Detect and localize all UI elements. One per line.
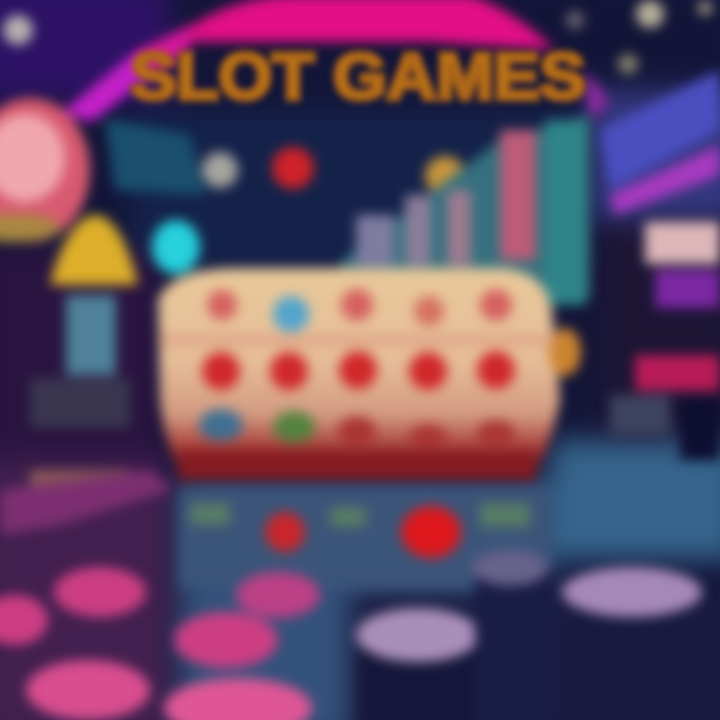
middle row symbols [202,351,515,390]
green indicators [190,503,530,527]
machine body [158,268,560,478]
machine side knob [549,328,581,376]
pink arch canopy [62,0,610,122]
top row symbols [207,289,512,332]
bar chart style backdrop [340,115,590,305]
machine base [178,450,536,480]
icon: red button large [401,506,461,558]
icon: floating symbols above machine [105,118,465,274]
title: SLOT GAMES [130,39,586,113]
left lamp [30,215,138,494]
pink stools left [0,470,320,720]
lower panel and buttons [180,488,550,588]
bottom row symbols [199,409,515,446]
button panel [180,488,550,588]
slot machine [158,268,581,480]
left globe [0,98,90,242]
ceiling lights [3,0,712,74]
right neon panels [600,70,720,460]
machine reel shading [160,335,555,345]
icon: red button small [265,512,305,552]
dark stools right [356,550,705,720]
